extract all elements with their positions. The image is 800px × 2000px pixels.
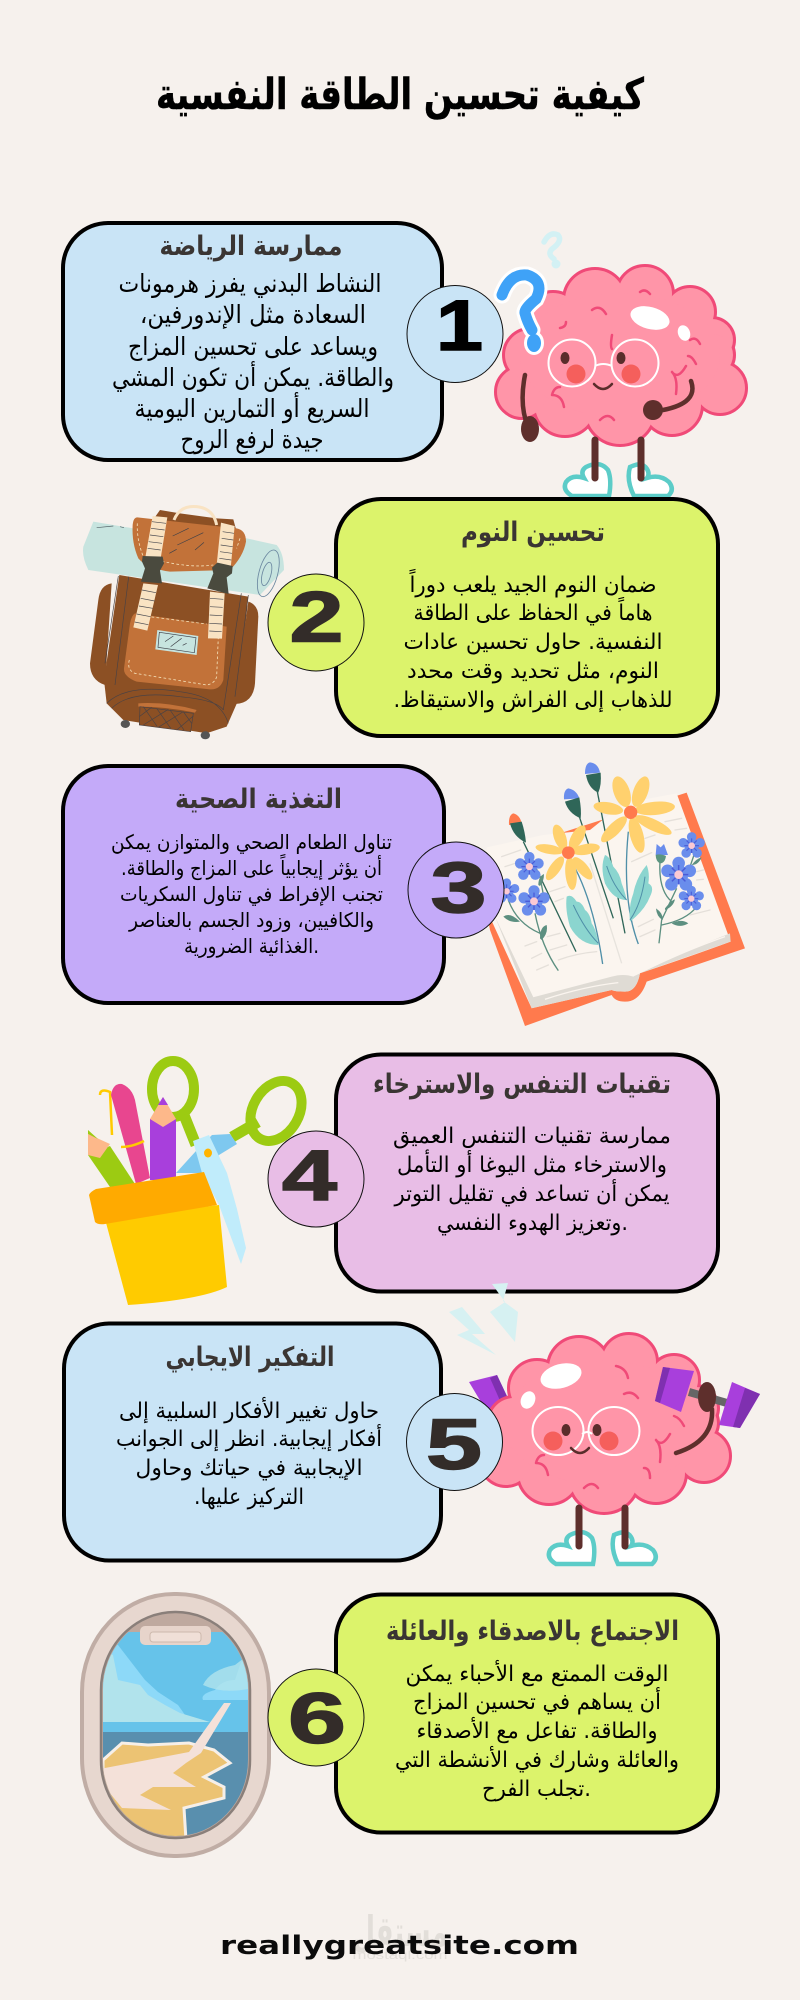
text: nutrition body xyxy=(111,830,392,958)
text: positive thinking body: الإيجابية في حياتك وحاول xyxy=(136,1456,362,1481)
text: sleep body xyxy=(394,568,672,713)
panel: friends and family card xyxy=(336,1594,718,1832)
illustration: pencil cup and scissors xyxy=(88,1061,312,1305)
watermark xyxy=(352,1907,448,1962)
text: sleep body: النوم، مثل تحديد وقت محدد xyxy=(407,659,659,684)
illustration: brain lifting dumbbell xyxy=(449,1283,760,1564)
text: positive thinking body xyxy=(116,1397,382,1510)
text: exercise body xyxy=(112,269,394,455)
icon: right dumbbell xyxy=(655,1367,760,1453)
watermark: mostaql.com xyxy=(352,1948,448,1962)
panel: positive thinking card xyxy=(64,1324,441,1560)
badge: number 3 xyxy=(408,842,504,938)
illustration: book with flowers xyxy=(477,762,745,1026)
text: nutrition body: والكافيين، وزود الجسم بالعناصر xyxy=(128,908,374,932)
text: sleep body: هاماً في الحفاظ على الطاقة xyxy=(414,596,652,626)
icon: left dumbbell xyxy=(469,1375,513,1417)
heading: breathing: تقنيات التنفس والاسترخاء xyxy=(373,1069,671,1100)
text: sleep body: النفسية. حاول تحسين عادات xyxy=(404,630,662,655)
illustration: thinking brain xyxy=(497,234,745,496)
icon: faded question mark xyxy=(544,234,560,268)
text: friends and family body: أن يساهم في تحسين المزاج xyxy=(413,1687,661,1715)
badge: number 5: 5 xyxy=(426,1406,482,1485)
icon: lightning bolts xyxy=(449,1283,518,1355)
title: كيفية تحسين الطاقة النفسية xyxy=(156,70,644,120)
panel: exercise card xyxy=(63,223,442,460)
text: sleep body: للذهاب إلى الفراش والاستيقاظ. xyxy=(394,688,672,713)
badge: number 4: 4 xyxy=(282,1137,338,1216)
badge: number 1 xyxy=(407,286,503,382)
scissors handles xyxy=(152,1061,312,1150)
panel: breathing card xyxy=(336,1054,718,1292)
text: sleep body: ضمان النوم الجيد يلعب دوراً xyxy=(409,568,656,598)
badge: number 2 xyxy=(268,574,364,671)
heading: exercise: ممارسة الرياضة xyxy=(160,231,342,262)
watermark: مستقل xyxy=(352,1907,448,1956)
badge: number 3: 3 xyxy=(430,849,486,928)
illustration: airplane window xyxy=(82,1594,269,1856)
text: nutrition body: أن يؤثر إيجابياً على المزاج والطاقة. xyxy=(121,854,382,881)
text: exercise body: السريع أو التمارين اليومية xyxy=(134,391,370,424)
text: friends and family body: والطاقة. تفاعل مع الأصدقاء xyxy=(416,1717,658,1744)
text: exercise body: السعادة مثل الإندورفين، xyxy=(140,300,366,330)
text: nutrition body: تجنب الإفراط في تناول السكريات xyxy=(120,882,383,907)
panel: sleep card xyxy=(336,499,718,736)
text: breathing body xyxy=(393,1124,671,1236)
icon: blue question mark xyxy=(502,275,544,355)
badge: number 2: 2 xyxy=(290,578,344,658)
illustration: backpack xyxy=(83,506,284,739)
text: positive thinking body: أفكار إيجابية. انظر إلى الجوانب xyxy=(116,1424,382,1452)
heading: positive thinking: التفكير الايجابي xyxy=(166,1342,334,1373)
text: exercise body: ويساعد على تحسين المزاج xyxy=(128,332,378,362)
text: breathing body: وتعزيز الهدوء النفسي. xyxy=(437,1211,628,1236)
text: breathing body: ممارسة تقنيات التنفس العميق xyxy=(393,1124,671,1149)
footer website: reallygreatsite.com xyxy=(220,1931,579,1961)
text: exercise body: جيدة لرفع الروح xyxy=(180,425,324,455)
heading: sleep: تحسين النوم xyxy=(461,517,605,548)
text: friends and family body: والعائلة وشارك في الأنشطة التي xyxy=(395,1746,679,1773)
text: positive thinking body: حاول تغيير الأفكار السلبية إلى xyxy=(119,1397,379,1424)
badge: number 5 xyxy=(406,1394,502,1490)
text: friends and family body: الوقت الممتع مع الأحباء يمكن xyxy=(406,1660,668,1687)
text: nutrition body: تناول الطعام الصحي والمتوازن يمكن xyxy=(111,830,392,855)
heading: nutrition: التغذية الصحية xyxy=(175,784,342,815)
badge: number 6 xyxy=(268,1669,364,1766)
text: exercise body: والطاقة. يمكن أن تكون المشي xyxy=(112,360,394,393)
text: nutrition body: الغذائية الضرورية. xyxy=(184,934,319,958)
badge: number 1: 1 xyxy=(436,287,483,366)
text: breathing body: يمكن أن تساعد في تقليل التوتر xyxy=(394,1179,670,1207)
text: friends and family body xyxy=(395,1660,679,1802)
badge: number 4 xyxy=(268,1131,364,1227)
badge: number 6: 6 xyxy=(288,1680,346,1759)
text: friends and family body: تجلب الفرح. xyxy=(482,1777,591,1802)
text: breathing body: والاسترخاء مثل اليوغا أو التأمل xyxy=(397,1149,667,1178)
heading: friends and family: الاجتماع بالاصدقاء والعائلة xyxy=(386,1616,679,1647)
text: exercise body: النشاط البدني يفرز هرمونات xyxy=(118,269,382,298)
text: positive thinking body: التركيز عليها. xyxy=(194,1485,304,1510)
panel: nutrition card xyxy=(63,766,444,1003)
